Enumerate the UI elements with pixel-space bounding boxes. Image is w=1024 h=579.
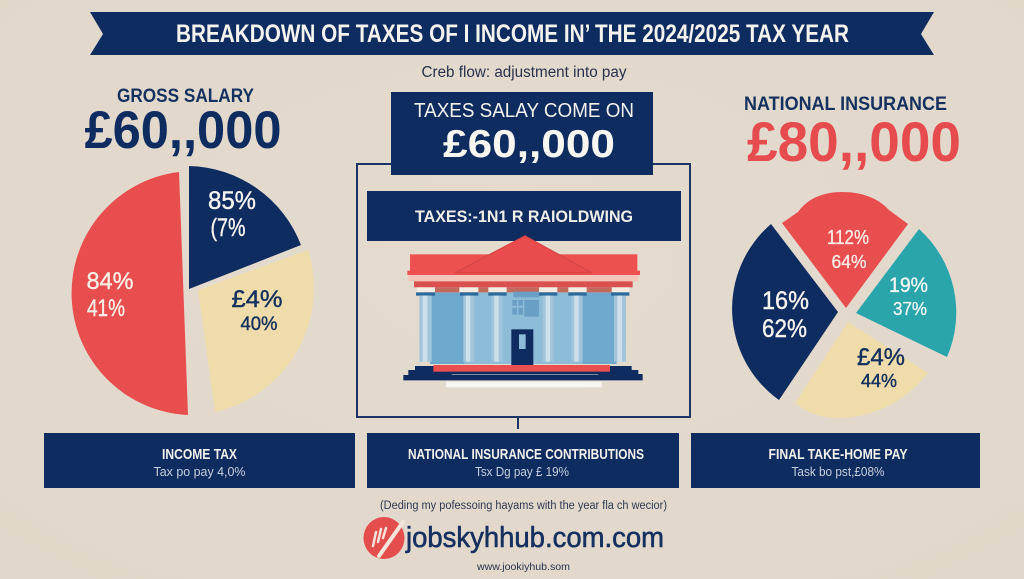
gross salary amount: £60,,000 xyxy=(84,101,282,160)
navy slice labels: (7% xyxy=(210,214,246,242)
cream slice labels: £4% xyxy=(232,286,282,313)
pie slice: red xyxy=(782,192,908,308)
callout: taxes salary: TAXES SALAY COME ON xyxy=(414,100,634,122)
cream slice labels: 44% xyxy=(861,371,897,391)
icon: government building xyxy=(403,236,643,387)
title banner: BREAKDOWN OF TAXES OF I INCOME IN’ THE 2024/2025 TAX YEAR xyxy=(176,20,849,48)
inner heading banner xyxy=(367,191,681,241)
cream slice labels xyxy=(857,344,905,391)
panel: income tax: Tax po pay 4,0% xyxy=(154,464,246,479)
navy slice labels xyxy=(208,187,256,242)
red slice labels: 64% xyxy=(832,252,866,272)
frame outline xyxy=(357,164,690,417)
red slice labels: 84% xyxy=(86,268,134,295)
red slice labels xyxy=(86,268,134,322)
pie chart: gross salary xyxy=(72,166,314,415)
panel: final take-home pay xyxy=(691,433,980,488)
panel: national insurance xyxy=(732,94,961,418)
red slice labels: 112% xyxy=(827,227,869,249)
heading: gross salary: GROSS SALARY xyxy=(117,86,254,107)
heading: national insurance: NATIONAL INSURANCE xyxy=(744,94,947,115)
panel: final take-home pay: FINAL TAKE-HOME PAY xyxy=(768,446,908,463)
connector stem xyxy=(517,417,519,429)
panel: gross salary xyxy=(72,86,314,415)
cream slice labels: 40% xyxy=(240,314,278,335)
panel: national insurance contributions xyxy=(367,433,679,488)
navy slice labels xyxy=(762,287,809,343)
subtitle: Creb flow: adjustment into pay xyxy=(422,64,627,81)
pie slice: navy xyxy=(732,224,838,400)
navy slice labels: 62% xyxy=(762,315,807,343)
panel: national insurance contributions: NATIONAL INSURANCE CONTRIBUTIONS xyxy=(408,446,644,463)
panel: national insurance contributions: Tsx Dg pay £ 19% xyxy=(475,464,569,479)
pie slice: cream xyxy=(198,250,314,412)
cream slice labels xyxy=(232,286,282,335)
pie slice: cream xyxy=(795,322,928,418)
red slice labels: 41% xyxy=(87,295,125,322)
teal slice labels: 19% xyxy=(889,274,928,297)
red slice labels xyxy=(827,227,869,272)
navy slice labels: 16% xyxy=(762,287,809,315)
cream slice labels: £4% xyxy=(857,344,905,371)
national insurance amount: £80,,000 xyxy=(747,110,961,173)
navy slice labels: 85% xyxy=(208,187,256,215)
panel: taxes frame xyxy=(357,92,690,429)
inner heading banner: TAXES:-1N1 R RAIOLDWING xyxy=(415,207,633,226)
teal slice labels: 37% xyxy=(893,299,927,319)
website url: www.jookiyhub.som xyxy=(476,561,570,573)
callout: taxes salary xyxy=(391,92,653,175)
panel: final take-home pay: Task bo pst,£08% xyxy=(792,464,885,479)
panel: income tax: INCOME TAX xyxy=(162,446,237,463)
icon: logo xyxy=(364,517,404,559)
pie slice: red xyxy=(72,172,188,415)
pie slice: teal xyxy=(856,229,956,357)
footnote: (Deding my pofessoing hayams with the year fla ch wecior) xyxy=(380,500,667,512)
logo wordmark: jobskyhhub.com.com xyxy=(405,522,664,554)
pie chart: national insurance xyxy=(732,192,956,418)
teal slice labels xyxy=(889,274,928,319)
pie slice: navy xyxy=(189,166,301,289)
callout: taxes salary: £60,,000 xyxy=(443,123,615,166)
title banner xyxy=(90,12,934,55)
panel: income tax xyxy=(44,433,355,488)
